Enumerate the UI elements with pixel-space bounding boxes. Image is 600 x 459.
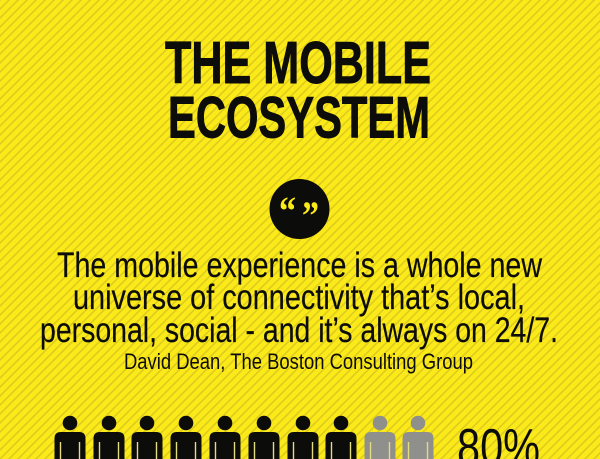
title: ECOSYSTEM — [168, 86, 430, 150]
pictogram: 80 percent of people — [54, 416, 434, 459]
quote text — [40, 246, 558, 350]
title — [165, 30, 431, 150]
icon: quotation marks: “ — [279, 188, 296, 233]
icon: quotation marks: ” — [302, 193, 319, 238]
title: THE MOBILE — [165, 30, 431, 96]
icon: quotation marks — [270, 179, 330, 239]
quote attribution: David Dean, The Boston Consulting Group — [124, 349, 473, 374]
